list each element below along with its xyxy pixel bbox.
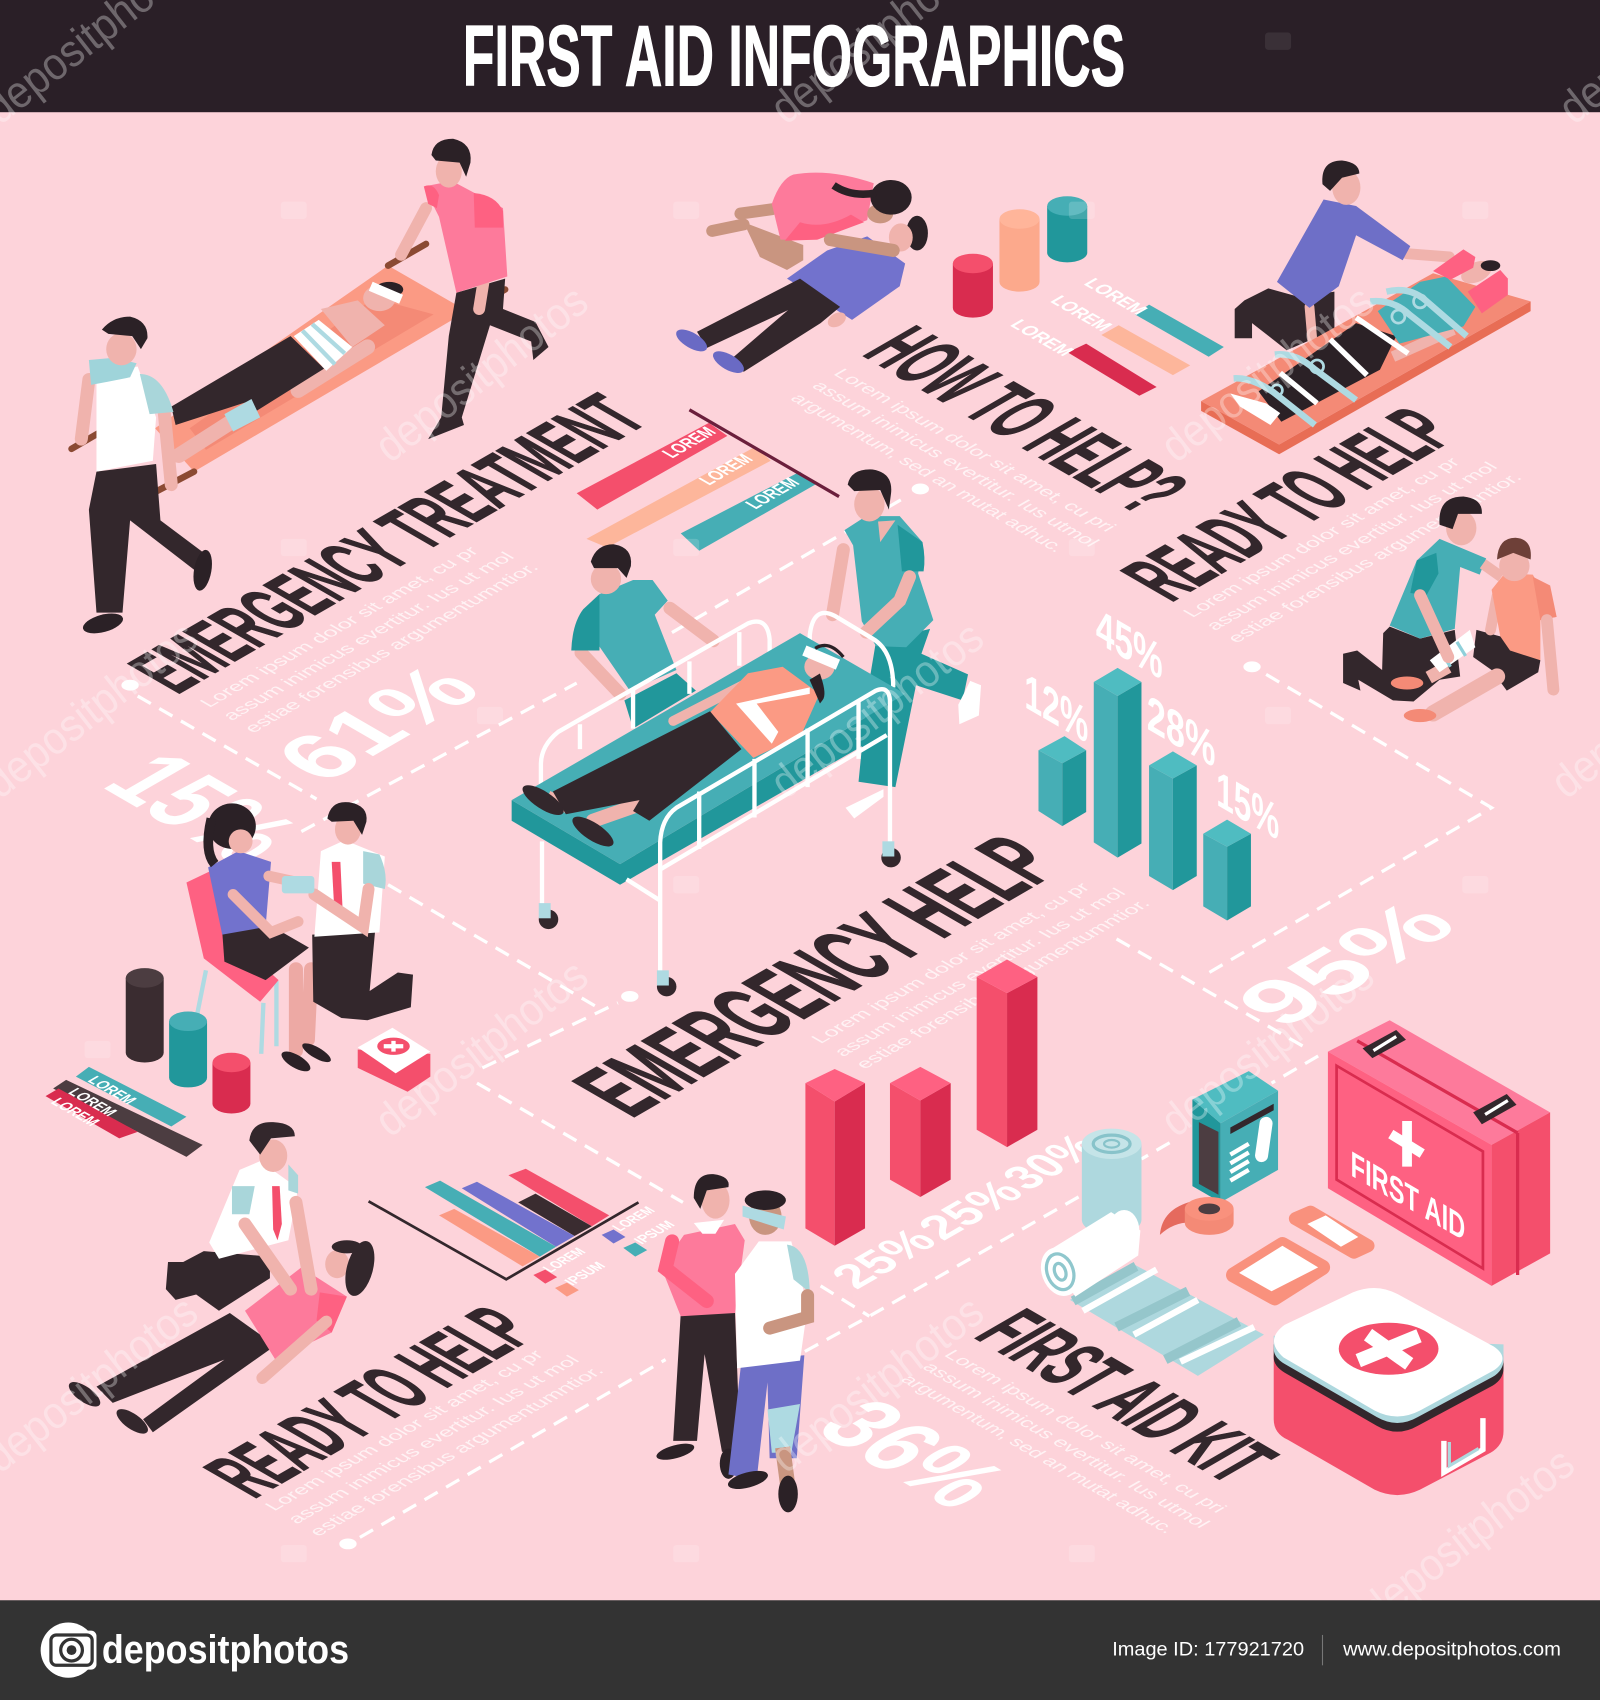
bar labels: 30% [991,1127,1112,1197]
footer logo [41,1622,349,1678]
chart legend [533,1205,679,1297]
bed patient [518,645,843,852]
watermark text: depositphotos [365,949,597,1146]
legend bars center: LOREM [694,451,758,488]
rescuer arms [245,1202,311,1289]
watermark text: depositphotos [761,611,993,808]
footer url: www.depositphotos.com [1342,1639,1561,1661]
small kit [358,1028,430,1092]
icon: first aid suitcase [1328,1020,1550,1286]
cylinder chart left [126,968,250,1113]
man in pink sweater [655,1174,745,1479]
text block: ready to help right: estiae forensibus argumentumntior. [1222,470,1526,645]
text block: ready to help left: Lorem ipsum dolor sit amet, cu pr [260,1347,548,1513]
text block: ready to help left: assum inimicus evertitur. Ius ut mol [282,1352,584,1526]
seated woman [208,803,333,1075]
text block: ready to help right: Lorem ipsum dolor sit amet, cu pr [1178,454,1464,620]
legend bars center: LOREM [741,475,805,512]
text block: how to help [786,366,1126,562]
bed wheels [539,841,901,996]
icon: adhesive tape [1160,1197,1234,1235]
watermark text: depositphotos [365,275,597,472]
watermark text: depositphotos [1351,1437,1584,1634]
nurse right [833,469,981,819]
mattress [512,633,906,885]
stat: 61%: 61% [254,652,501,794]
bar chart teal [1024,597,1279,920]
bar labels: 28% [1147,684,1215,779]
kneeling man with tie [282,802,413,1020]
watermark text: depositphotos [1151,275,1383,472]
stretcher [72,244,505,493]
text block: emergency treatment: estiae forensibus argumentumntior. [239,560,543,735]
patient on stretcher [171,282,403,455]
stat: 36%: 36% [794,1386,1031,1522]
text block: ready to help left: estiae forensibus argumentumntior. [304,1363,608,1539]
bar labels: 25% [820,1221,949,1296]
text block: ready to help right [1178,444,1526,645]
text block: emergency treatment: Lorem ipsum dolor sit amet, cu pr [194,543,483,710]
near bed rail and legs [542,689,890,973]
footer bar [0,1600,1600,1700]
icon: white bandage roll [1034,1210,1140,1301]
bar 25% [805,1069,865,1246]
watermark text: depositphotos [761,1285,993,1482]
figure: hospital bed with nurses [512,469,981,996]
chart legend: IPSUM [561,1260,610,1288]
bar 45% [1094,668,1141,858]
text block: how to help: argumentum, sed an mutat adhuc. [786,390,1071,555]
bar chart red [805,960,1112,1296]
cylinder chart top [953,196,1087,318]
legend bars left [46,1067,203,1157]
text block: emergency help: estiae forensibus argumentumntior. [850,896,1155,1072]
legend bars left: LOREM [83,1074,140,1107]
watermark camera marks [85,33,1488,1562]
purple kneeling man [1235,160,1449,350]
icon: first aid kit box [1274,1288,1504,1495]
bar labels [1024,597,1279,852]
spine board [1201,273,1531,454]
text block: how to help: assum inimicus evertitur. Ius utmol [807,378,1104,550]
text block: emergency treatment [194,534,543,735]
lying woman [65,1238,380,1438]
figure: woman on chair with bandaged arm [186,802,430,1092]
heading: first aid kit: FIRST AID KIT [956,1298,1296,1494]
pink shirt carrier [401,139,549,439]
legend bars left: LOREM [64,1086,121,1119]
icon: medicine box [1192,1071,1278,1202]
footer logo: depositphotos [102,1628,349,1672]
dashed connector lines [138,495,1492,1537]
bar labels: 25% [907,1173,1035,1247]
chart bottom left [369,1169,679,1297]
text block: ready to help left [260,1338,608,1539]
legend bars left: LOREM [46,1096,103,1128]
case label: FIRST AID [1351,1143,1465,1249]
rescuer [166,1122,298,1311]
figure: supported injured man [655,1174,810,1512]
text block: first aid kit: assum inimicus evertitur. Ius utmol [918,1359,1215,1531]
bar 12% [1038,736,1086,826]
figure: stretcher team [72,139,549,637]
nurse left [571,544,713,729]
text block: emergency help: assum inimicus evertitur. Ius ut mol [828,885,1130,1059]
footer image id: Image ID: 177921720 [1112,1639,1304,1661]
heading: ready to help left: READY TO HELP [184,1295,555,1509]
bar 28% [1149,751,1197,890]
text block: first aid kit: argumentum, sed an mutat adhuc. [896,1372,1181,1536]
heading: emergency treatment: EMERGENCY TREATMENT [109,383,666,704]
heading: how to help: HOW TO HELP? [844,315,1209,525]
legend bars center: LOREM [657,424,721,461]
rescuer woman [712,173,874,270]
white shirt carrier [81,317,215,637]
icon: bandage strip [1070,1263,1264,1376]
text block: first aid kit [896,1347,1237,1543]
chart legend: LOREM [539,1246,590,1275]
title: FIRST AID INFOGRAPHICS [463,8,1125,105]
icon: upright bandage roll [1082,1129,1141,1235]
text block: emergency help: Lorem ipsum dolor sit amet, cu pr [806,879,1094,1046]
chart bars [425,1169,609,1266]
bar 25% second [890,1067,951,1197]
bar 30% [977,960,1037,1147]
watermark text: depositphotos [1151,949,1383,1146]
connector dots [121,484,1261,1549]
figure: patient on board [1201,160,1531,454]
icon: large plaster [1234,1245,1322,1298]
figure: leg bandaging pair [1343,497,1557,722]
legend bars center [577,410,839,551]
chair [186,872,279,1054]
legend bars top: LOREM [1045,293,1117,334]
text block: ready to help right: assum inimicus evertitur. Ius ut mol [1200,459,1502,633]
text block: first aid kit: Lorem ipsum dolor sit amet, cu pri [940,1347,1232,1516]
cross [1391,1121,1422,1167]
bar 15% [1203,820,1251,920]
text block: emergency treatment: assum inimicus evertitur. Ius ut mol [217,549,519,723]
bar labels: 15% [1216,759,1279,852]
chart legend: LOREM [609,1205,659,1234]
legend bars top [1005,276,1224,396]
bar labels: 12% [1024,662,1088,755]
bandaged man [726,1190,810,1512]
header bar [0,0,1600,112]
strapped patient [1230,249,1508,425]
figure: CPR scene [65,1122,380,1438]
text block: how to help: Lorem ipsum dolor sit amet, cu pri [829,366,1121,534]
bar labels: 45% [1096,597,1163,691]
stat: 95%: 95% [1215,888,1477,1039]
stat: 15%: 15% [80,737,325,879]
figure: mouth to mouth rescue [673,173,928,377]
heading: emergency help: EMERGENCY HELP [550,822,1085,1130]
bar labels [820,1127,1112,1296]
woman head and arm [830,180,912,250]
icon: small plaster [1295,1212,1368,1252]
lying man [673,216,928,377]
legend bars top: LOREM [1079,276,1152,318]
text block: emergency help [806,870,1155,1072]
chart legend: IPSUM [630,1219,679,1247]
far bed rail [541,613,893,786]
legend bars top: LOREM [1005,317,1078,359]
